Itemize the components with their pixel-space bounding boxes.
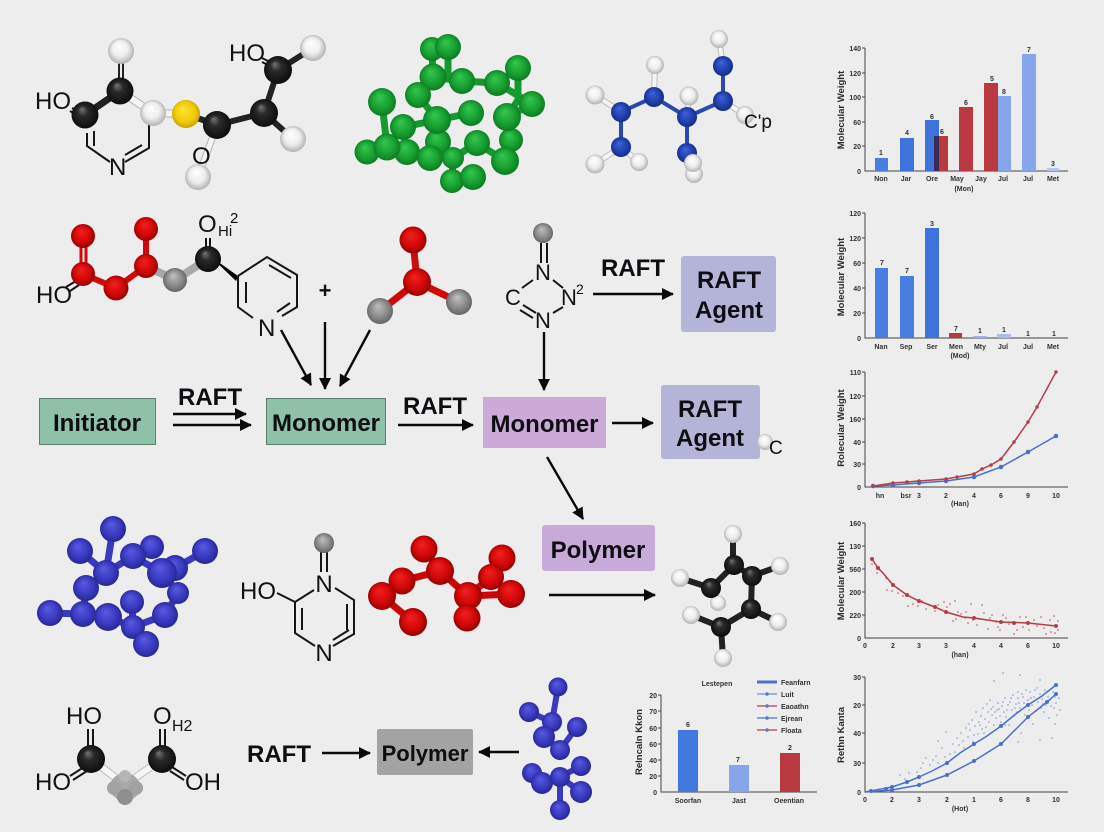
molecule: red chain with pyridine: N xyxy=(258,315,275,342)
molecule: hydroxy pyrazine: HO xyxy=(240,578,276,605)
line chart: molecular weight growth: 2 xyxy=(944,493,948,500)
scatter chart: molecular weight decay: 220 xyxy=(849,613,861,620)
bar chart: molecular weight 1: (Mon) xyxy=(954,186,974,193)
scatter chart: molecular weight decay: 6 xyxy=(1026,643,1030,650)
molecule: diacid: HO xyxy=(66,703,102,730)
line chart: molecular weight growth: 110 xyxy=(850,370,861,377)
arrow to RAFT agent xyxy=(593,293,673,295)
line chart: molecular weight growth: Rolecular Weight xyxy=(836,388,847,467)
molecule: violet cluster xyxy=(37,516,218,657)
small white atom with C: C xyxy=(769,438,783,459)
bar chart: molecular weight 1: 6 xyxy=(964,100,968,107)
molecule: red and gray trigonal xyxy=(367,226,472,324)
molecule: diacid: OH xyxy=(185,769,221,796)
bar chart: molecular weight 2: (Mod) xyxy=(950,353,970,360)
bar chart: molecular weight 1: 8 xyxy=(1002,89,1006,96)
molecule: red chain with pyridine: 2 xyxy=(230,210,238,227)
RAFT label bottom: RAFT xyxy=(247,741,311,768)
bar chart: molecular weight 1: 60 xyxy=(853,120,861,127)
legend: Floata xyxy=(781,728,802,735)
line chart: molecular weight growth: 4 xyxy=(972,493,976,500)
line chart: molecular weight growth: 160 xyxy=(849,417,861,424)
bar chart: molecular weight 2: Met xyxy=(1047,344,1060,351)
bar chart: molecular weight 2: 1 xyxy=(1026,331,1030,338)
bar chart: molecular weight 1 xyxy=(836,46,1068,193)
scatter chart: blue ratio xyxy=(836,673,1068,813)
bar chart: molecular weight 2: 7 xyxy=(905,268,909,275)
scatter chart: blue ratio: 2 xyxy=(890,797,894,804)
bar chart: molecular weight 2: 1 xyxy=(978,328,982,335)
scatter chart: molecular weight decay: 10 xyxy=(1052,643,1060,650)
bar chart: molecular weight 2: Sep xyxy=(900,344,912,351)
bar chart with legend: 60 xyxy=(649,742,657,749)
bar chart: molecular weight 1: Jar xyxy=(901,176,912,183)
line chart: molecular weight growth xyxy=(836,370,1068,508)
scatter chart: blue ratio: 0 xyxy=(863,797,867,804)
box: monomer green: Monomer xyxy=(272,410,380,437)
scatter chart: molecular weight decay: 130 xyxy=(849,544,861,551)
bar chart with legend: Oeentian xyxy=(774,798,804,805)
arrow to purple monomer xyxy=(398,424,473,426)
arrow to RAFT agent middle xyxy=(612,422,653,424)
box: RAFT agent top: Agent xyxy=(695,297,763,324)
bar chart: molecular weight 2: 20 xyxy=(853,311,861,318)
scatter chart: blue ratio: 6 xyxy=(999,797,1003,804)
bar chart: molecular weight 1: 0 xyxy=(857,169,861,176)
scatter chart: molecular weight decay: 0 xyxy=(857,636,861,643)
molecule: triazine xyxy=(505,223,584,333)
molecule: triazine: C xyxy=(505,285,521,310)
legend: Luit xyxy=(781,692,794,699)
bar chart with legend: Soorfan xyxy=(675,798,701,805)
scatter chart: blue ratio: Rethn Kanta xyxy=(836,706,847,763)
scatter chart: molecular weight decay: Molecular Weight xyxy=(836,541,847,620)
scatter chart: blue ratio: 40 xyxy=(853,731,861,738)
bar chart: molecular weight 2 xyxy=(836,211,1068,360)
double arrow xyxy=(173,414,251,425)
bar chart: molecular weight 2: 7 xyxy=(880,260,884,267)
bar chart: molecular weight 1: Jul xyxy=(998,176,1008,183)
box: RAFT agent top xyxy=(681,256,776,332)
molecule: hydroxy pyrazine xyxy=(240,533,354,667)
box: monomer green xyxy=(266,398,386,444)
bar chart: molecular weight 2: 40 xyxy=(853,286,861,293)
scatter chart: blue ratio: 0 xyxy=(857,790,861,797)
scatter chart: molecular weight decay xyxy=(836,521,1068,659)
bar chart: molecular weight 1: 7 xyxy=(1027,47,1031,54)
molecule: black pyridine thiol: O xyxy=(192,143,211,170)
box: polymer gray xyxy=(377,729,473,775)
bar chart: molecular weight 1: May xyxy=(950,176,964,183)
legend xyxy=(757,680,811,735)
box: RAFT agent middle: RAFT xyxy=(678,396,742,423)
legend: Eaoathn xyxy=(781,704,809,711)
bar chart with legend: 7 xyxy=(736,757,740,764)
bar chart: molecular weight 1: 6 xyxy=(930,114,934,121)
bar chart with legend: 20 xyxy=(649,693,657,700)
bar chart: molecular weight 2: 0 xyxy=(857,336,861,343)
molecule: diacid: O xyxy=(153,703,172,730)
RAFT label middle: RAFT xyxy=(403,393,467,420)
line chart: molecular weight growth: 40 xyxy=(853,440,861,447)
scatter chart: blue ratio: 10 xyxy=(1052,797,1060,804)
bar chart: molecular weight 2: 3 xyxy=(930,221,934,228)
box: monomer purple: Monomer xyxy=(490,411,598,438)
molecule: hydroxy pyrazine: N xyxy=(315,640,333,667)
bar chart with legend: 60 xyxy=(649,726,657,733)
line chart: molecular weight growth: bsr xyxy=(901,493,912,500)
molecule: violet double cluster xyxy=(519,678,592,820)
bar chart: molecular weight 2: 120 xyxy=(849,236,861,243)
scatter chart: molecular weight decay: 2 xyxy=(891,643,895,650)
molecule: black pyridine thiol xyxy=(35,35,326,190)
line chart: molecular weight growth: 10 xyxy=(1052,493,1060,500)
bar chart with legend: 2 xyxy=(788,745,792,752)
bar chart: molecular weight 2: Molecular Weight xyxy=(836,237,847,316)
bar chart: molecular weight 2: 120 xyxy=(849,211,861,218)
scatter chart: molecular weight decay: 160 xyxy=(849,521,861,528)
box: RAFT agent top: RAFT xyxy=(697,267,761,294)
molecule: triazine: N xyxy=(561,285,577,310)
molecule: red chain with pyridine: O xyxy=(198,211,217,238)
bar chart with legend: Jast xyxy=(732,798,747,805)
bar chart: molecular weight 1: Non xyxy=(874,176,888,183)
RAFT label over double arrow: RAFT xyxy=(178,384,242,411)
scatter chart: molecular weight decay: 560 xyxy=(849,567,861,574)
bar chart: molecular weight 1: 20 xyxy=(853,144,861,151)
scatter chart: blue ratio: 1 xyxy=(972,797,976,804)
molecule: triazine: 2 xyxy=(576,281,584,297)
molecule: red chain with pyridine: Hi xyxy=(218,223,232,240)
scatter chart: molecular weight decay: 4 xyxy=(999,643,1003,650)
molecule: red chain with pyridine: HO xyxy=(36,282,72,309)
bar chart: molecular weight 1: 6 xyxy=(940,129,944,136)
scatter chart: molecular weight decay: (han) xyxy=(951,652,969,659)
bar chart: molecular weight 2: 1 xyxy=(1002,327,1006,334)
arrow from violet molecule xyxy=(479,751,519,753)
scatter chart: blue ratio: 3 xyxy=(917,797,921,804)
RAFT label top: RAFT xyxy=(601,255,665,282)
molecule: diacid: HO xyxy=(35,769,71,796)
molecule: diacid: H2 xyxy=(172,718,193,735)
bar chart: molecular weight 1: 1 xyxy=(879,150,883,157)
molecule: black and white ring xyxy=(671,525,789,667)
arrows into monomer xyxy=(281,322,370,389)
bar chart with legend: 40 xyxy=(649,758,657,765)
scatter chart: blue ratio: (Hot) xyxy=(952,806,968,813)
scatter chart: blue ratio: 30 xyxy=(853,761,861,768)
bar chart with legend: 6 xyxy=(686,722,690,729)
line chart: molecular weight growth: 120 xyxy=(849,394,861,401)
legend: Ejrean xyxy=(781,716,802,723)
molecule: black pyridine thiol: HO xyxy=(229,40,265,67)
scatter chart: blue ratio: 30 xyxy=(853,675,861,682)
bar chart with legend xyxy=(634,680,817,805)
molecule: blue amine chain: C'p xyxy=(744,112,772,133)
molecule: triazine: N xyxy=(535,308,551,333)
bar chart: molecular weight 2: 1 xyxy=(1052,331,1056,338)
bar chart: molecular weight 1: 140 xyxy=(849,46,861,53)
bar chart: molecular weight 1: Jul xyxy=(1023,176,1033,183)
molecule: black pyridine thiol: HO xyxy=(35,88,71,115)
bar chart: molecular weight 1: 4 xyxy=(905,130,909,137)
bar chart: molecular weight 2: Mty xyxy=(974,344,986,351)
bar chart: molecular weight 1: 100 xyxy=(849,95,861,102)
box: RAFT agent middle: Agent xyxy=(676,425,744,452)
molecule: black pyridine thiol: N xyxy=(109,154,126,181)
molecule: triazine: N xyxy=(535,260,551,285)
line chart: molecular weight growth: hn xyxy=(876,493,884,500)
bar chart: molecular weight 2: Men xyxy=(949,344,963,351)
bar chart: molecular weight 1: Met xyxy=(1047,176,1060,183)
scatter chart: blue ratio: 2 xyxy=(945,797,949,804)
scatter chart: molecular weight decay: 3 xyxy=(917,643,921,650)
scatter chart: blue ratio: 8 xyxy=(1026,797,1030,804)
bar chart: molecular weight 1: 120 xyxy=(849,71,861,78)
molecule: diacid xyxy=(35,703,221,805)
bar chart: molecular weight 2: Ser xyxy=(926,344,938,351)
line chart: molecular weight growth: 9 xyxy=(1026,493,1030,500)
bar chart: molecular weight 2: 7 xyxy=(954,326,958,333)
bar chart: molecular weight 1: Molecular Weight xyxy=(836,70,847,149)
molecule: hydroxy pyrazine: N xyxy=(315,571,333,598)
bar chart with legend: Lestepen xyxy=(702,681,732,688)
line chart: molecular weight growth: 30 xyxy=(853,462,861,469)
scatter chart: molecular weight decay: 4 xyxy=(972,643,976,650)
box: monomer purple xyxy=(483,397,606,448)
bar chart: molecular weight 1: Ore xyxy=(926,176,938,183)
arrow down to monomer xyxy=(543,332,545,390)
line chart: molecular weight growth: (Han) xyxy=(951,501,969,508)
box: polymer purple: Polymer xyxy=(551,537,645,564)
arrow to polymer xyxy=(547,457,583,519)
line chart: molecular weight growth: 6 xyxy=(999,493,1003,500)
molecule: blue amine chain xyxy=(586,30,772,183)
legend: Feanfarn xyxy=(781,680,811,687)
bar chart: molecular weight 1: 3 xyxy=(1051,161,1055,168)
bar chart with legend: 20 xyxy=(649,774,657,781)
molecule: red cluster xyxy=(368,536,525,636)
bar chart: molecular weight 1: Jay xyxy=(975,176,987,183)
molecule: red chain with pyridine xyxy=(36,210,297,342)
plus sign: + xyxy=(319,278,331,303)
bar chart: molecular weight 2: Nan xyxy=(874,344,888,351)
bar chart: molecular weight 1: 5 xyxy=(990,76,994,83)
arrow to gray polymer xyxy=(322,752,370,754)
arrow to black ring xyxy=(549,594,655,596)
bar chart: molecular weight 2: 60 xyxy=(853,261,861,268)
small white atom with C xyxy=(757,434,783,459)
box: polymer gray: Polymer xyxy=(382,741,469,766)
bar chart: molecular weight 2: Jul xyxy=(1023,344,1033,351)
box: polymer purple xyxy=(542,525,655,571)
bar chart with legend: 70 xyxy=(649,709,657,716)
scatter chart: molecular weight decay: 200 xyxy=(849,590,861,597)
bar chart with legend: Relncaln Kkon xyxy=(634,709,645,775)
bar chart: molecular weight 2: Jul xyxy=(998,344,1008,351)
box: initiator: Initiator xyxy=(53,410,141,437)
line chart: molecular weight growth: 0 xyxy=(857,485,861,492)
box: initiator xyxy=(40,398,156,444)
molecule: green cluster xyxy=(354,34,545,193)
scatter chart: blue ratio: 20 xyxy=(853,703,861,710)
box: RAFT agent middle xyxy=(661,385,760,459)
bar chart with legend: 0 xyxy=(653,790,657,797)
scatter chart: molecular weight decay: 3 xyxy=(944,643,948,650)
scatter chart: molecular weight decay: 0 xyxy=(863,643,867,650)
line chart: molecular weight growth: 3 xyxy=(917,493,921,500)
